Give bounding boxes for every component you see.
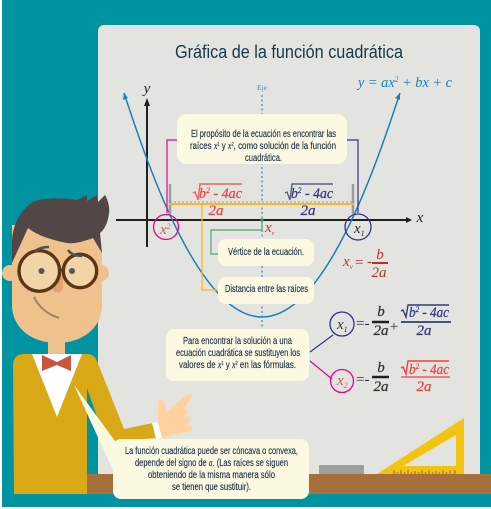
formula x1: - 4ac (419, 305, 449, 321)
chart: parabola with axes: Eje (257, 83, 268, 92)
icon: set square (377, 418, 464, 474)
formula x2: 2a (374, 379, 388, 395)
half distance formula red: - 4ac (210, 186, 242, 202)
formula x1: b (377, 304, 385, 320)
callout: concavity: depende del signo de a. (Las raíces se siguen (135, 458, 288, 469)
callout: distance: Distancia entre las raíces (225, 284, 308, 295)
cuff (152, 422, 162, 439)
callout: concavity (74, 385, 309, 499)
nose (52, 270, 63, 292)
callout: substitute: valores de x (179, 360, 225, 371)
formula x1: 2 (416, 305, 419, 314)
icon: eraser (319, 465, 364, 475)
root x2 marker (154, 214, 178, 240)
formula x2 (310, 360, 450, 395)
half distance formula red: b (199, 186, 206, 202)
callout: concavity: se tienen que sustituir). (172, 482, 251, 493)
half distance formula navy: 2a (300, 203, 316, 219)
neck (48, 335, 65, 359)
board ledge (87, 474, 491, 494)
callout: substitute (166, 329, 309, 381)
root x2 marker: 2 (167, 222, 171, 231)
callout: substitute: y (224, 360, 232, 371)
callout: concavity: obteniendo de la misma manera sólo (148, 470, 275, 481)
mouth (34, 297, 59, 318)
chart: parabola with axes: x (416, 210, 424, 226)
vertex formula: x (343, 254, 350, 270)
shirt (32, 354, 82, 417)
root x1 marker (345, 214, 371, 240)
vertex label: x (265, 220, 272, 236)
eyebrows (35, 247, 82, 256)
callout: purpose: 2 (231, 142, 234, 148)
vertex connector (211, 218, 264, 254)
half distance formula navy: - 4ac (302, 186, 333, 202)
callout: concavity: La función cuadrática puede ser cóncava o convexa, (125, 446, 298, 457)
root x2 marker: x (160, 222, 167, 238)
formula x2: x (337, 373, 344, 389)
formula x2: 2 (416, 362, 419, 371)
vertex label: v (272, 231, 275, 237)
formula x2: b (377, 360, 385, 376)
chart: parabola with axes (116, 81, 424, 330)
callout: substitute: 1 (221, 361, 224, 367)
formula x1: b (409, 305, 416, 321)
callout: substitute: en las fórmulas. (238, 360, 296, 371)
bow tie (42, 355, 71, 371)
formula x1: 2a (416, 323, 432, 339)
panel: board (98, 25, 480, 480)
general equation: + bx + c (398, 75, 452, 91)
vertex formula (342, 247, 388, 281)
half distance formula red (193, 184, 242, 219)
torso (13, 354, 87, 494)
formula x2: =- (356, 372, 369, 388)
formula x1: =- (356, 316, 369, 332)
vertex formula: = (355, 255, 363, 271)
face (12, 225, 102, 343)
vertex formula: 2a (372, 265, 386, 281)
half distance formula navy: b (291, 186, 298, 202)
general equation: y = ax (358, 75, 396, 91)
callout: purpose: cuadrática. (245, 153, 282, 164)
callout: vertex (218, 239, 314, 266)
callout: vertex: Vértice de la ecuación. (228, 247, 304, 258)
callout: substitute: x (231, 360, 236, 371)
vertex formula: b (376, 247, 384, 263)
callout: purpose: , como solución de la función (234, 141, 336, 152)
half distance formula red: 2a (208, 203, 224, 219)
callout: substitute: 2 (236, 361, 238, 367)
vertex formula: v (350, 263, 354, 271)
callout: purpose: y (220, 141, 228, 152)
formula x2: 2a (416, 379, 432, 395)
formula x2: b (409, 362, 416, 378)
callout: purpose: raíces x (190, 141, 218, 152)
formula x1: + (390, 319, 398, 335)
formula x2: 2 (344, 381, 348, 390)
formula x2: - 4ac (419, 362, 449, 378)
formula x1: x (337, 317, 344, 333)
half distance formula red: 2 (206, 186, 210, 195)
hand (158, 394, 192, 438)
sleeve (80, 354, 157, 441)
formula x1 (310, 304, 451, 352)
hair (12, 195, 109, 263)
root connector lines (167, 140, 177, 213)
half distance formula navy: 2 (298, 186, 302, 195)
chart: parabola with axes: y (142, 81, 151, 97)
half distance formula navy (285, 184, 333, 219)
character: teacher (2, 195, 192, 494)
callout: substitute: Para encontrar la solución a una (183, 336, 292, 347)
formula x1: 1 (344, 325, 348, 334)
root x1 marker: x (354, 221, 361, 237)
callout: distance (218, 277, 314, 304)
root connector line navy (347, 140, 358, 213)
callout: substitute: ecuación cuadrática se sustituyen los (176, 348, 300, 359)
callout: purpose: 1 (217, 142, 220, 148)
root x1 marker: 1 (361, 229, 365, 238)
callout: purpose (177, 114, 347, 164)
ears (2, 265, 109, 281)
glasses (19, 251, 97, 291)
vertex formula: - (367, 254, 372, 270)
callout: purpose: El propósito de la ecuación es encontrar las (191, 129, 336, 140)
distance brackets (169, 184, 354, 290)
general equation: 2 (395, 75, 398, 84)
callout: purpose: x (227, 141, 232, 152)
title: Gráfica de la función cuadrática (175, 42, 404, 62)
formula x1: 2a (374, 323, 388, 339)
